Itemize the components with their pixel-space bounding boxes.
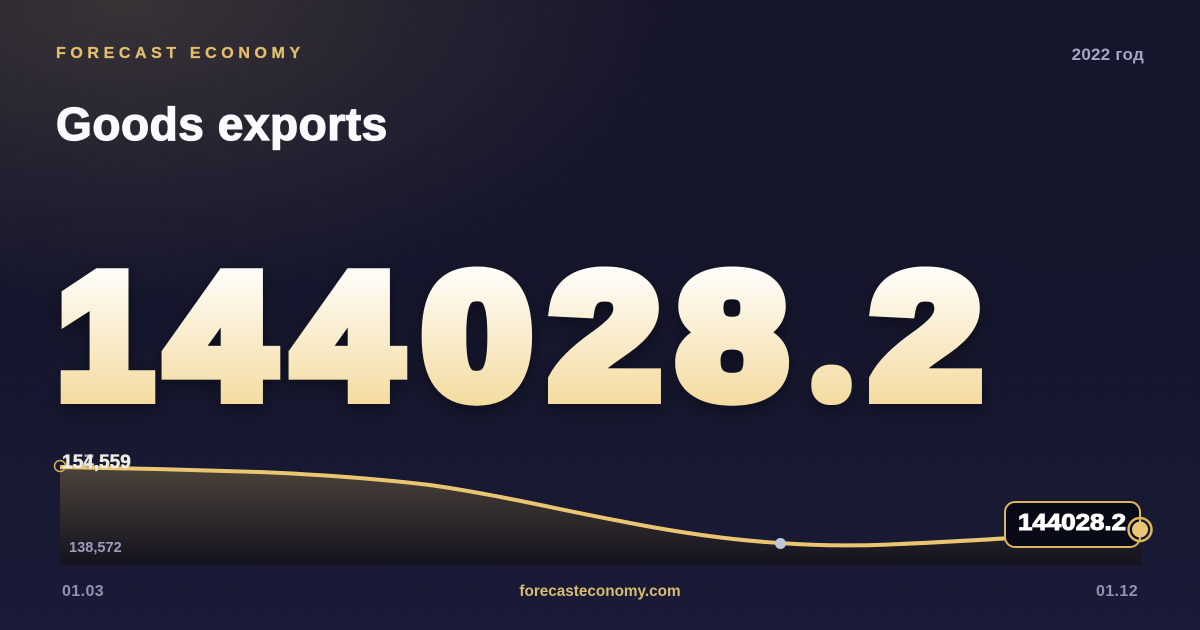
value callout xyxy=(1005,502,1140,547)
max label: 157,559 xyxy=(62,452,131,473)
start date: 01.03 xyxy=(62,583,104,600)
main value: 2 xyxy=(871,240,981,433)
main value: 2 xyxy=(550,240,660,433)
chart area fill xyxy=(60,467,1141,565)
end date: 01.12 xyxy=(1096,583,1138,600)
max label: 154,559 xyxy=(62,452,131,473)
value callout: 144028.2 xyxy=(1018,509,1126,535)
end marker xyxy=(1128,518,1152,541)
main value: 1 xyxy=(58,239,152,433)
mid marker xyxy=(775,538,786,549)
source: forecasteconomy.com xyxy=(519,583,681,600)
main value: 0 xyxy=(423,239,531,434)
main value: 8 xyxy=(678,239,786,434)
line chart xyxy=(54,452,1153,565)
main value xyxy=(58,238,984,434)
brand label: FORECAST ECONOMY xyxy=(56,45,305,62)
start marker xyxy=(54,460,66,472)
main value: . xyxy=(827,361,836,394)
main value: 4 xyxy=(294,238,400,433)
min label: 138,572 xyxy=(69,540,122,556)
year label: 2022 год xyxy=(1072,45,1144,64)
title: Goods exports xyxy=(56,98,388,150)
chart line xyxy=(60,467,1140,545)
main value: 4 xyxy=(167,238,273,433)
